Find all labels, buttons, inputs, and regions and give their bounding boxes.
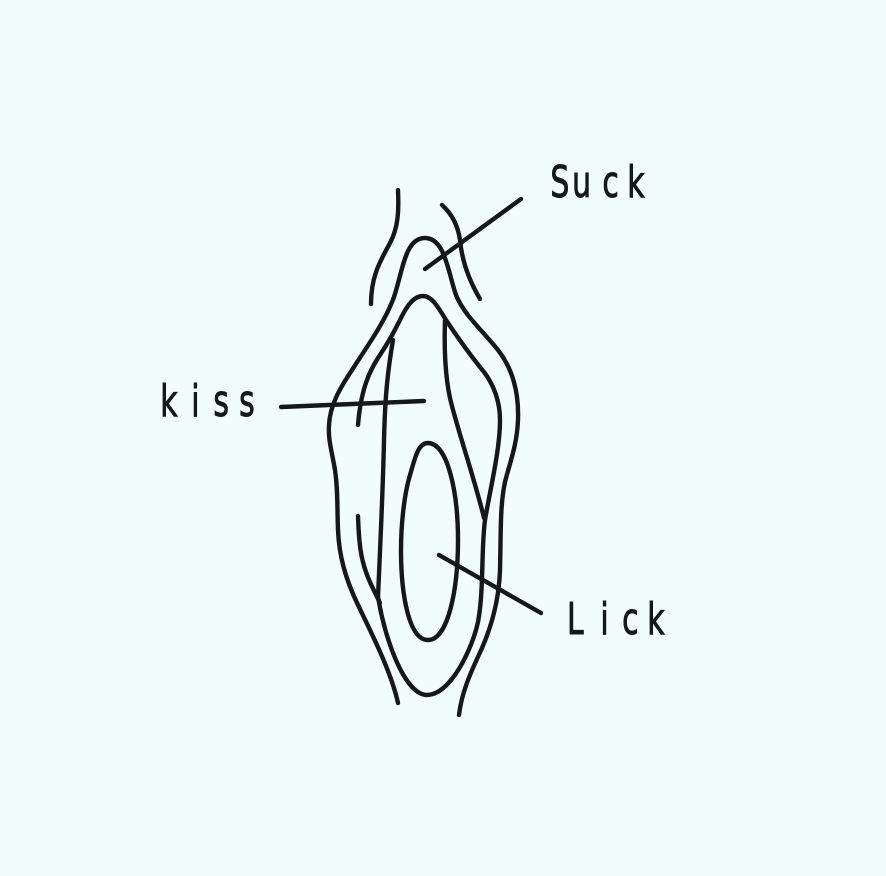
label: kiss: kiss	[160, 375, 255, 427]
label: Suck: Suck	[550, 156, 645, 208]
leader line: Lick	[439, 555, 541, 613]
outline drawing	[329, 190, 518, 715]
leader line: Suck	[425, 199, 521, 269]
label: Lick: Lick	[567, 593, 665, 645]
inner oval	[401, 443, 458, 640]
leader line: kiss	[281, 401, 424, 407]
